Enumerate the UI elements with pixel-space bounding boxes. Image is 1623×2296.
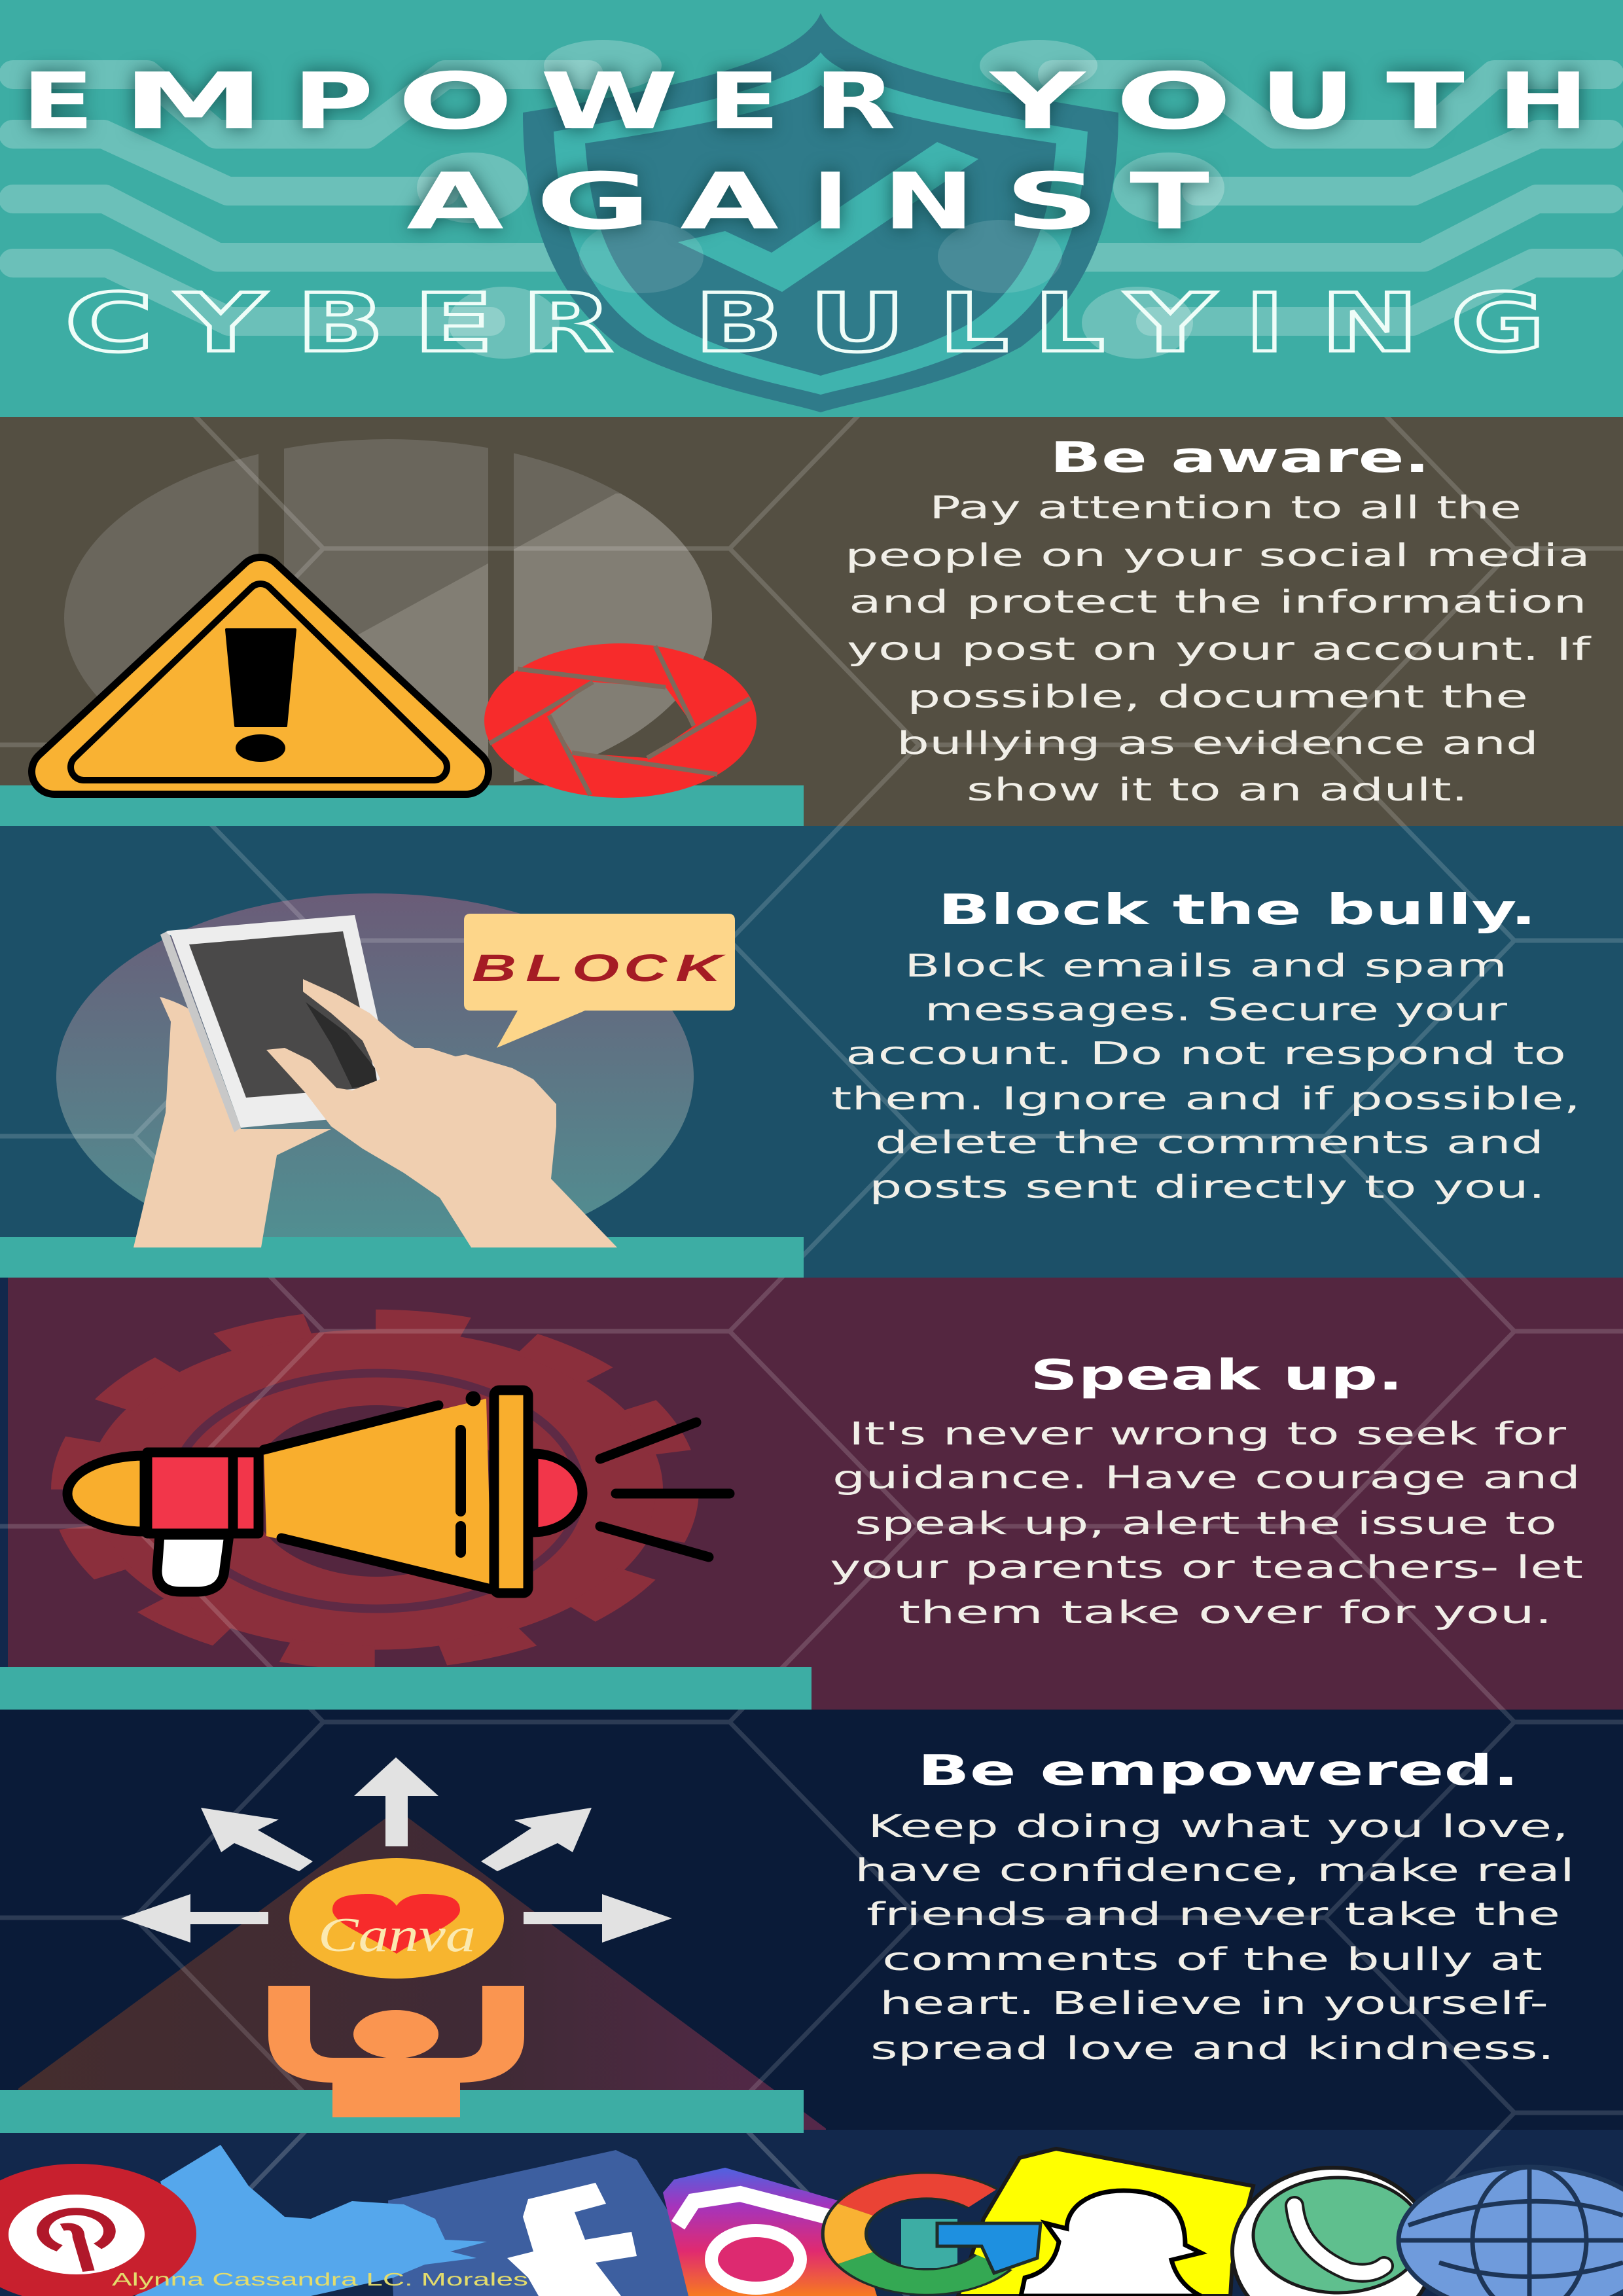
title line 3: Y [1124,277,1217,370]
text: be empowered: heart. Believe in yourself- [880,1985,1548,2022]
icon: whatsapp [1232,2168,1434,2296]
text: be empowered [855,1747,1575,2067]
callout: block: K [675,947,726,990]
title line 1: E [707,57,780,147]
text: block the bully: messages. Secure your [925,992,1507,1028]
icon: globe [1399,2167,1623,2296]
title line 1: T [1386,57,1465,147]
text: block the bully: them. Ignore and if possible, [831,1081,1580,1117]
title line 3: Y [175,277,267,370]
title line 1: R [814,57,896,147]
text: be aware: Be aware. [1050,434,1430,482]
text: be aware: bullying as evidence and [897,725,1539,762]
text: be aware: and protect the information [849,584,1587,620]
title line 1: U [1259,57,1356,147]
text: be empowered: comments of the bully at [882,1941,1543,1978]
icon: megaphone [67,1390,730,1593]
text: be aware: show it to an adult. [967,772,1468,808]
panel: speak up [0,1278,1623,1710]
icon: instagram [663,2168,877,2296]
title line 1: H [1497,57,1589,147]
text: speak up: them take over for you. [899,1594,1552,1631]
text: be aware: possible, document the [907,679,1528,715]
text: be aware: people on your social media [845,537,1590,574]
header panel [0,0,1623,417]
circuit lines: right [1013,75,1610,321]
title line 1: Y [988,57,1087,147]
text: speak up: guidance. Have courage and [832,1460,1580,1496]
callout: block: O [572,947,619,990]
text: be aware: Pay attention to all the [929,490,1522,526]
circuit nodes [417,40,1224,359]
title line 3: C [65,277,153,370]
title line 1: W [540,57,679,147]
title line 3: G [1451,277,1545,370]
panel: social media footer [0,2130,1623,2296]
text: block the bully [831,886,1580,1206]
shelf [0,2090,804,2133]
title line 3: L [1034,277,1105,370]
decorative gear [73,1321,677,1658]
callout: block: L [526,947,563,990]
title line 2: S [1005,157,1099,247]
icon: google [844,2185,1041,2282]
title line 2: A [406,157,504,247]
text: block the bully: Block the bully. [938,886,1537,935]
icon: facebook [388,2150,720,2296]
title line 1: M [122,57,265,147]
decorative broken circle [64,439,712,783]
text: speak up [830,1352,1583,1631]
shelf [0,1667,812,1710]
icon: arrows [121,1757,672,1943]
title line 3: I [1245,277,1284,370]
icon: person [268,1986,524,2117]
title line 1: O [1115,57,1232,147]
text: be empowered: have confidence, make real [855,1852,1575,1889]
text: be aware [845,434,1592,808]
text: speak up: your parents or teachers- let [830,1549,1583,1586]
title line 3: N [1321,277,1419,370]
icon: heart coin [289,1858,504,1979]
title line 3: E [414,277,493,370]
title line 1: E [22,57,94,147]
title line 1: P [293,57,374,147]
title line 2: G [535,157,652,247]
icon: snapchat [958,2149,1253,2296]
text: speak up: speak up, alert the issue to [855,1505,1557,1542]
shield [523,13,1118,412]
icon: heart coin: Canva [318,1909,476,1962]
panel: be aware [0,417,1623,826]
text: be empowered: Be empowered. [918,1747,1519,1795]
title line 3: R [522,277,613,370]
text: be empowered: Keep doing what you love, [868,1808,1569,1845]
icon: red aperture [484,643,757,798]
author credit: Alynna Cassandra LC. Morales [112,2269,528,2289]
text: block the bully: Block emails and spam [904,948,1507,984]
text: speak up: Speak up. [1030,1352,1403,1400]
title line 2: T [1130,157,1209,247]
title line 1: O [397,57,514,147]
title line 3: L [939,277,1008,370]
shelf [0,1237,804,1278]
text: speak up: It's never wrong to seek for [849,1416,1566,1452]
text: be empowered: spread love and kindness. [870,2030,1554,2067]
callout: block: B [472,947,516,990]
icon: hands holding phone [134,915,617,1247]
panel: be empowered [0,1710,1623,2133]
title line 2: A [680,157,779,247]
icon: pinterest [0,2164,196,2296]
callout: block [464,914,735,1048]
panel: block the bully [0,826,1623,1278]
decorative triangle [18,1810,826,2130]
title line 3: B [296,277,384,370]
text: be aware: you post on your account. If [847,631,1592,668]
text: block the bully: posts sent directly to you. [869,1169,1545,1206]
icon: warning triangle [54,580,466,772]
circuit lines: left [13,75,628,321]
icon: twitter [135,2145,487,2296]
title line 3: U [809,277,906,370]
shelf [0,785,804,826]
text: block the bully: delete the comments and [875,1124,1544,1161]
title line 3: B [694,277,783,370]
title line 2: I [812,157,849,247]
title line 2: N [883,157,974,247]
callout: block: C [624,947,668,990]
text: block the bully: account. Do not respond to [846,1035,1566,1072]
decorative circle [56,893,694,1260]
text: be empowered: friends and never take the [866,1896,1560,1933]
